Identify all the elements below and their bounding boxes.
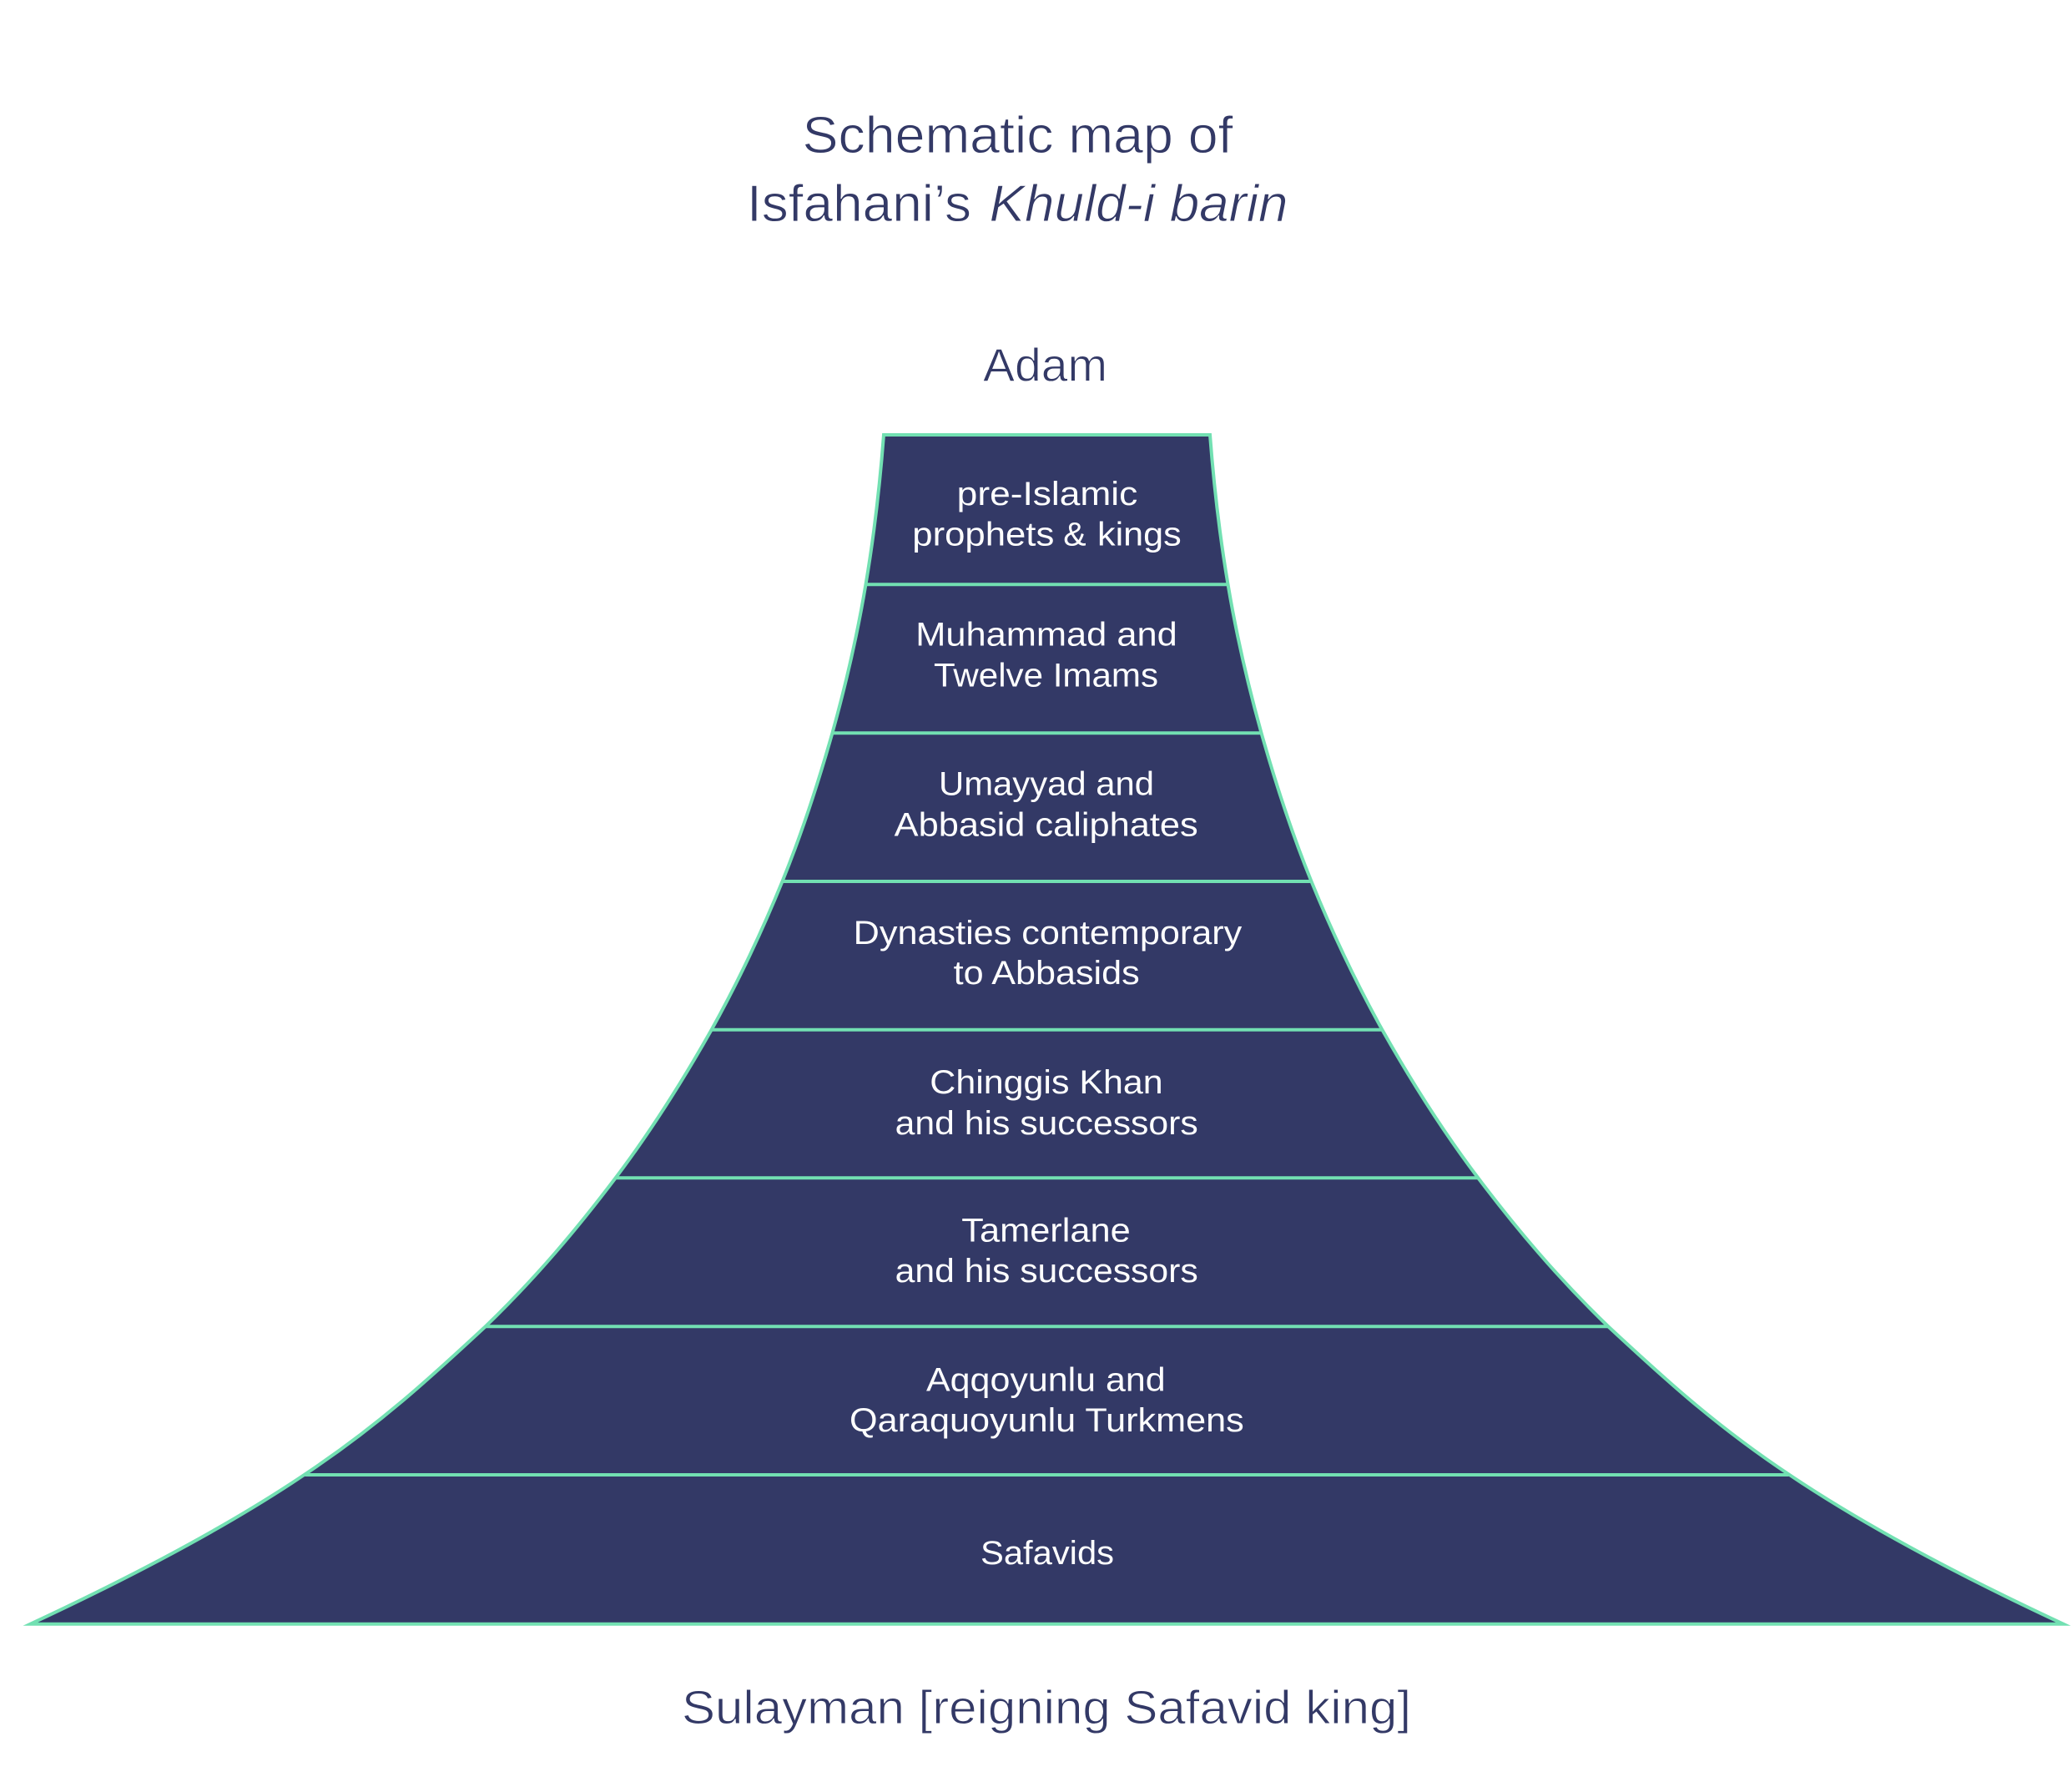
bottom label: Sulayman: Sulayman [reigning Safavid king] — [682, 1681, 1411, 1734]
tier 7 label: Aqqoyunlu and — [926, 1362, 1166, 1399]
tier 4 label: Dynasties contemporary — [854, 915, 1242, 952]
title line 2 italic: Khuld-i barin — [990, 175, 1288, 233]
tier 7 label: Qaraquoyunlu Turkmens — [849, 1402, 1244, 1439]
tier 4 label: to Abbasids — [954, 955, 1140, 992]
tier 2 label: Twelve Imams — [934, 658, 1158, 694]
tier 2 label: Muhammad and — [915, 616, 1177, 653]
tier 3 label: Umayyad and — [939, 766, 1154, 803]
tier 1 label: kings — [1097, 516, 1182, 553]
tier 2 label — [915, 616, 1177, 694]
mountain shape — [30, 435, 2063, 1624]
tier 6 label: Tamerlane — [961, 1212, 1131, 1249]
tier 3 label — [895, 766, 1198, 844]
tier 4 label — [854, 915, 1242, 992]
tier 6 label: and his successors — [895, 1253, 1198, 1290]
title line 1: Schematic map of — [803, 107, 1233, 164]
title line 2: Isfahani’s — [747, 175, 971, 233]
tier 7 label — [849, 1362, 1244, 1439]
tier 5 label: Chinggis Khan — [930, 1064, 1163, 1101]
title — [747, 107, 1288, 233]
mountain diagram — [30, 435, 2063, 1624]
tier 1 label: prophets — [912, 516, 1054, 553]
tier 1 label: pre-Islamic — [957, 476, 1137, 512]
top label: Adam: Adam — [983, 339, 1107, 391]
tier 1 label: & — [1063, 516, 1086, 553]
tier 5 label: and his successors — [895, 1105, 1198, 1142]
tier 8 label: Safavids — [981, 1535, 1114, 1572]
tier 3 label: Abbasid caliphates — [895, 807, 1198, 844]
tier 5 label — [895, 1064, 1198, 1142]
tier dividers — [305, 584, 1789, 1475]
tier 1 label — [912, 476, 1182, 553]
tier 6 label — [895, 1212, 1198, 1290]
